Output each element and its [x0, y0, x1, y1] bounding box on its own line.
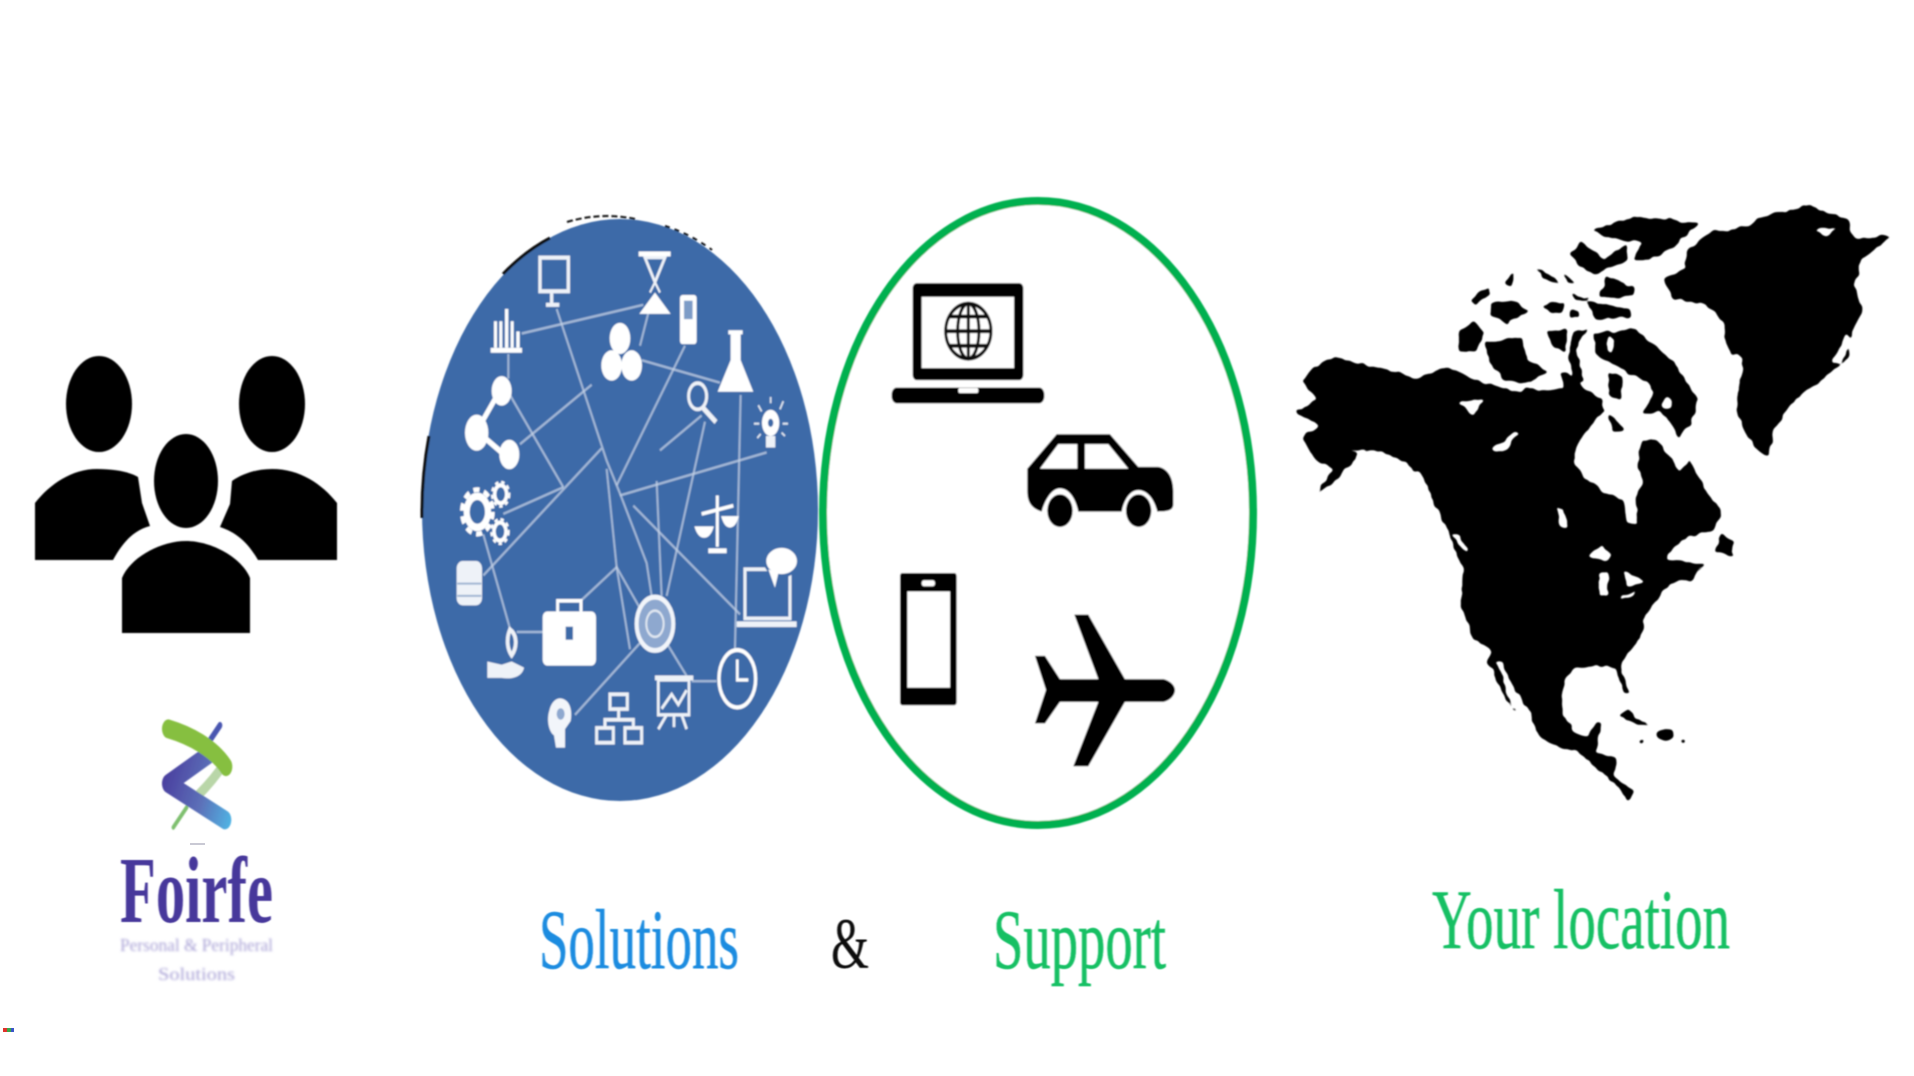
icon: smartphone	[900, 573, 957, 705]
icon: presentation board	[655, 678, 693, 729]
logo tagline	[120, 935, 273, 984]
icon: monitor	[540, 258, 568, 305]
icon: hand with figure	[487, 630, 524, 678]
network content	[457, 252, 798, 748]
icon: database	[457, 561, 482, 605]
icon: clock	[719, 650, 756, 707]
mainland	[1296, 357, 1721, 800]
Newfoundland	[1715, 533, 1733, 557]
icon: hexagon cluster	[601, 323, 642, 381]
circle background	[422, 219, 818, 801]
logo tagline: Personal & Peripheral	[120, 935, 273, 955]
icon: laptop with speech bubble	[737, 546, 798, 627]
label: Your location: Your location	[1432, 873, 1730, 967]
icon: share nodes	[465, 376, 519, 469]
panel: solutions network circle	[422, 216, 818, 801]
icon: bar chart	[491, 309, 522, 353]
icon: head with gear	[548, 698, 571, 748]
icon: hourglass	[639, 252, 671, 314]
small colour mark	[3, 1028, 14, 1032]
label: Solutions: Solutions	[539, 893, 739, 987]
Nova Scotia	[1684, 564, 1707, 582]
Caribbean islands	[1618, 709, 1686, 743]
logo: Foirfe	[120, 725, 273, 984]
car wheels	[1047, 494, 1151, 527]
logo wordmark: Foirfe	[120, 839, 273, 943]
panel: support circle	[823, 201, 1253, 825]
label: ampersand: &	[831, 904, 869, 984]
label: Support: Support	[993, 893, 1166, 987]
map: North America and Greenland	[1285, 195, 1905, 815]
dark edge fragments	[422, 216, 712, 518]
logo tagline: Solutions	[158, 964, 235, 984]
icon: light bulb	[754, 397, 788, 447]
icon: gears	[462, 482, 509, 544]
icon: laptop with globe	[892, 283, 1044, 403]
icon: organisation network	[597, 694, 642, 743]
Arctic islands	[1461, 217, 1699, 438]
icon: airplane	[1035, 615, 1175, 766]
icon: scales of justice	[697, 495, 737, 551]
Baffin island inlets	[1607, 336, 1673, 426]
logo mark	[168, 725, 226, 827]
icon: briefcase	[543, 601, 596, 666]
lakes and inland water	[1346, 399, 1699, 709]
Greenland fjords	[1728, 225, 1852, 379]
icon: globe seal	[637, 597, 673, 650]
icon: car	[1027, 434, 1173, 512]
icon: magnifier	[689, 383, 716, 422]
icon: group of three people	[35, 356, 337, 633]
icon: phone	[680, 295, 697, 344]
Baja California	[1487, 652, 1518, 710]
logo small mark	[190, 843, 205, 845]
icon: flask	[718, 330, 753, 392]
Greenland	[1664, 206, 1891, 458]
green circle outline	[823, 201, 1253, 825]
connecting lines	[483, 305, 767, 715]
